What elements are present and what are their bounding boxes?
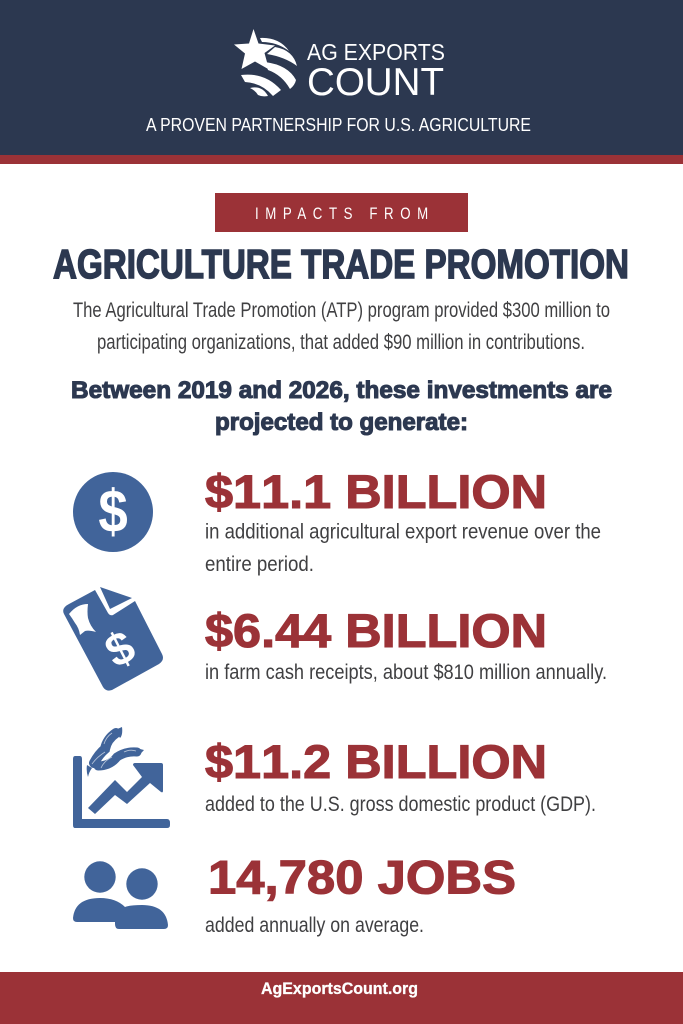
icon: logo star and striped globe: [234, 29, 297, 96]
icon: dollar coin: [73, 472, 153, 552]
logo wordmark: [307, 39, 445, 104]
stat: GDP: $11.2 BILLION: [205, 735, 547, 788]
stat: GDP: added to the U.S. gross domestic product (GDP).: [205, 793, 596, 816]
label: impacts from: IMPACTS FROM: [255, 205, 428, 223]
logo wordmark: COUNT: [307, 61, 444, 104]
icon: growth chart with soybean pods: [73, 727, 170, 828]
subheading: projected to generate:: [215, 409, 468, 436]
stat: export revenue: entire period.: [205, 553, 314, 576]
stat: farm cash receipts: [205, 604, 607, 684]
icon: dollar coin: $: [98, 478, 128, 545]
logo wordmark: AG EXPORTS: [307, 39, 445, 65]
stat: farm cash receipts: $6.44 BILLION: [205, 604, 547, 657]
label: impacts from: [215, 193, 468, 232]
tagline: A PROVEN PARTNERSHIP FOR U.S. AGRICULTURE: [146, 115, 531, 135]
intro paragraph: [73, 299, 610, 354]
footer band: [0, 972, 683, 1024]
subheading: Between 2019 and 2026, these investments are: [71, 377, 612, 404]
footer band: AgExportsCount.org: [261, 979, 418, 998]
stat: jobs: added annually on average.: [205, 914, 424, 937]
stat: export revenue: $11.1 BILLION: [205, 465, 547, 518]
stat: jobs: 14,780 JOBS: [208, 850, 516, 904]
stat: jobs: [205, 850, 516, 937]
stat: export revenue: [205, 465, 601, 576]
icon: people: [73, 861, 168, 929]
header band: [0, 0, 683, 164]
icon: farm receipt with fish and dollar: $: [97, 620, 143, 678]
subheading: [71, 377, 612, 436]
stat: farm cash receipts: in farm cash receipts, about $810 million annually.: [205, 661, 607, 684]
stat: export revenue: in additional agricultural export revenue over the: [205, 520, 601, 544]
stat: GDP: [205, 735, 596, 816]
icon: farm receipt with fish and dollar: [63, 587, 163, 691]
